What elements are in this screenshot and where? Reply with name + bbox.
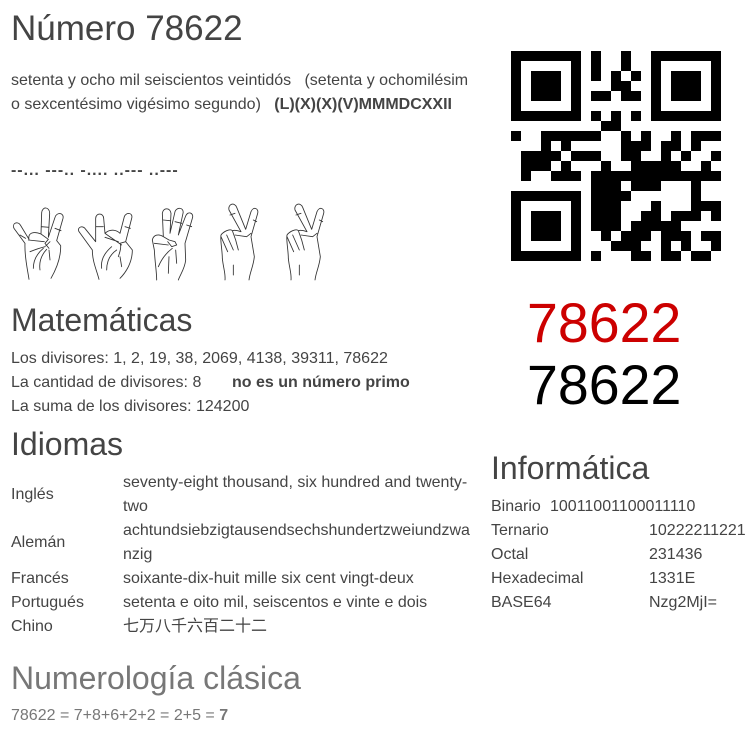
title: Número 78622 (11, 9, 243, 48)
table: languages (11, 474, 470, 635)
base labels: BASE64 (491, 594, 551, 611)
text block: divisors: Los divisores: 1, 2, 19, 38, 2069, 4138, 39311, 78622 (11, 350, 388, 367)
language labels: Portugués (11, 594, 84, 611)
text block: number in words and roman numeral (11, 72, 468, 113)
text block: number in words and roman numeral: setenta y ocho mil seiscientos veintidós (setenta y ochomilésim (11, 72, 468, 89)
icon: sign language hands (13, 204, 324, 280)
binary value: 10011001100011110 (550, 498, 695, 515)
base labels (491, 522, 583, 611)
language labels (11, 486, 84, 635)
language translations: soixante-dix-huit mille six cent vingt-deux (123, 570, 414, 587)
heading: Idiomas: Idiomas (11, 426, 123, 462)
language labels: Inglés (11, 486, 54, 503)
binary row: Binario (491, 498, 541, 515)
language translations: nzig (123, 546, 152, 563)
language translations: achtundsiebzigtausendsechshundertzweiundzwa (123, 522, 470, 539)
black number: 78622 (527, 354, 681, 416)
text block: divisors: La suma de los divisores: 124200 (11, 398, 249, 415)
language translations: setenta e oito mil, seiscentos e vinte e dois (123, 594, 427, 611)
base labels: Hexadecimal (491, 570, 583, 587)
language labels: Chino (11, 618, 53, 635)
language translations (123, 474, 470, 635)
base values: 231436 (649, 546, 702, 563)
base labels: Octal (491, 546, 528, 563)
heading: Informática: Informática (491, 450, 649, 486)
numerology sum: 78622 = 7+8+6+2+2 = 2+5 = 7 (11, 707, 228, 724)
base labels: Ternario (491, 522, 549, 539)
language labels: Francés (11, 570, 69, 587)
base values (649, 522, 746, 611)
text block: divisors (11, 350, 388, 415)
base values: 10222211221 (649, 522, 746, 539)
text block: number in words and roman numeral: o sexcentésimo vigésimo segundo) (L)(X)(X)(V)MMMDCXXII (11, 96, 452, 113)
text block: divisors: La cantidad de divisores: 8 (11, 374, 201, 391)
language translations: seventy-eight thousand, six hundred and twenty- (123, 474, 467, 491)
heading: Numerología clásica: Numerología clásica (11, 660, 301, 696)
base values: 1331E (649, 570, 695, 587)
language labels: Alemán (11, 534, 65, 551)
table: number bases (491, 498, 746, 611)
morse code: --... ---.. -.... ..--- ..--- (11, 162, 179, 179)
QR code (511, 51, 721, 261)
language translations: 七万八千六百二十二 (123, 618, 267, 635)
heading: Matemáticas: Matemáticas (11, 302, 192, 338)
note: not prime: no es un número primo (232, 374, 410, 391)
red number: 78622 (527, 292, 681, 354)
base values: Nzg2MjI= (649, 594, 717, 611)
language translations: two (123, 498, 148, 515)
